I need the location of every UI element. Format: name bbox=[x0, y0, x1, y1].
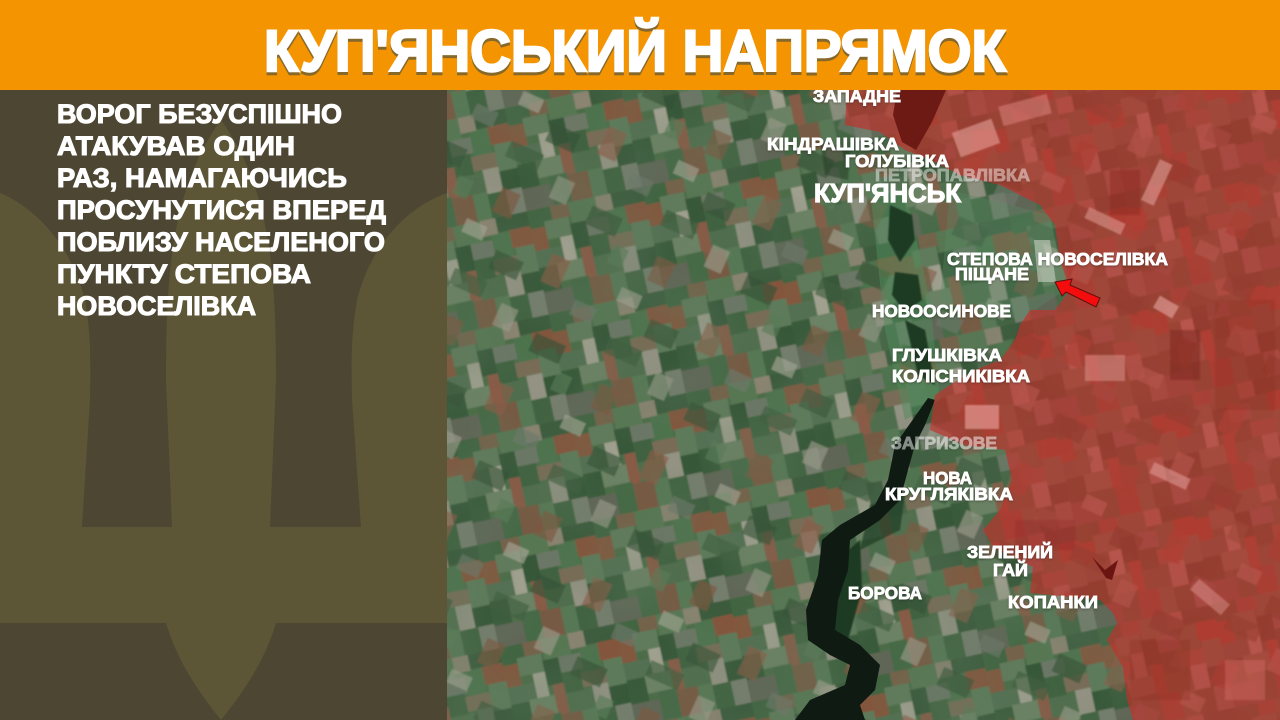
arrow: attack direction bbox=[1055, 279, 1100, 307]
label: Піщане: ПІЩАНЕ bbox=[955, 264, 1029, 284]
label: Петропавлівка: ПЕТРОПАВЛІВКА bbox=[875, 165, 1030, 185]
map labels bbox=[767, 86, 1168, 612]
label: Копанки: КОПАНКИ bbox=[1008, 592, 1098, 612]
title: КУП'ЯНСЬКИЙ НАПРЯМОК bbox=[264, 19, 1007, 84]
pink and dark fields in red area bbox=[952, 94, 1275, 700]
description text: НОВОСЕЛІВКА bbox=[57, 291, 256, 321]
reservoir in red area bbox=[893, 90, 946, 150]
header bar bbox=[0, 0, 1280, 90]
satellite map bbox=[440, 85, 1280, 720]
label: Кіндрашівка: КІНДРАШІВКА bbox=[767, 134, 899, 154]
label: Западне: ЗАПАДНЕ bbox=[813, 86, 901, 106]
light green valley around Kupiansk bbox=[870, 190, 940, 420]
farmland fields bbox=[440, 85, 1280, 720]
light field cluster bbox=[1034, 240, 1056, 282]
label: Степова Новоселівка: СТЕПОВА НОВОСЕЛІВКА bbox=[947, 249, 1168, 269]
label: Глушківка: ГЛУШКІВКА bbox=[892, 345, 1002, 365]
side panel background bbox=[0, 90, 447, 720]
label: Колісниківка: КОЛІСНИКІВКА bbox=[892, 366, 1030, 386]
description text: ПОБЛИЗУ НАСЕЛЕНОГО bbox=[57, 227, 385, 257]
description text: ВОРОГ БЕЗУСПІШНО bbox=[57, 99, 342, 129]
forest patches bbox=[820, 140, 935, 640]
river bbox=[795, 398, 935, 720]
trident emblem bbox=[0, 120, 447, 720]
label: Нова Кругляківка: КРУГЛЯКІВКА bbox=[885, 484, 1013, 504]
label: Новоосинове: НОВООСИНОВЕ bbox=[872, 301, 1011, 321]
label: Нова Кругляківка bbox=[885, 468, 1013, 504]
description text: ПРОСУНУТИСЯ ВПЕРЕД bbox=[57, 195, 386, 225]
tone overlays bbox=[447, 90, 1280, 720]
label: Голубівка: ГОЛУБІВКА bbox=[845, 151, 949, 171]
red occupied area bbox=[845, 90, 1280, 720]
label: Куп'янськ: КУП'ЯНСЬК bbox=[814, 178, 961, 208]
description text bbox=[57, 99, 386, 321]
label: Нова Кругляківка: НОВА bbox=[923, 468, 972, 488]
description text: РАЗ, НАМАГАЮЧИСЬ bbox=[57, 163, 347, 193]
label: Зелений Гай bbox=[967, 541, 1053, 580]
label: Загризове: ЗАГРИЗОВЕ bbox=[891, 433, 997, 453]
description text: АТАКУВАВ ОДИН bbox=[57, 131, 295, 161]
description text: ПУНКТУ СТЕПОВА bbox=[57, 259, 311, 289]
label: Борова: БОРОВА bbox=[848, 583, 922, 603]
label: Зелений Гай: ЗЕЛЕНИЙ bbox=[967, 541, 1053, 562]
label: Зелений Гай: ГАЙ bbox=[993, 559, 1028, 580]
